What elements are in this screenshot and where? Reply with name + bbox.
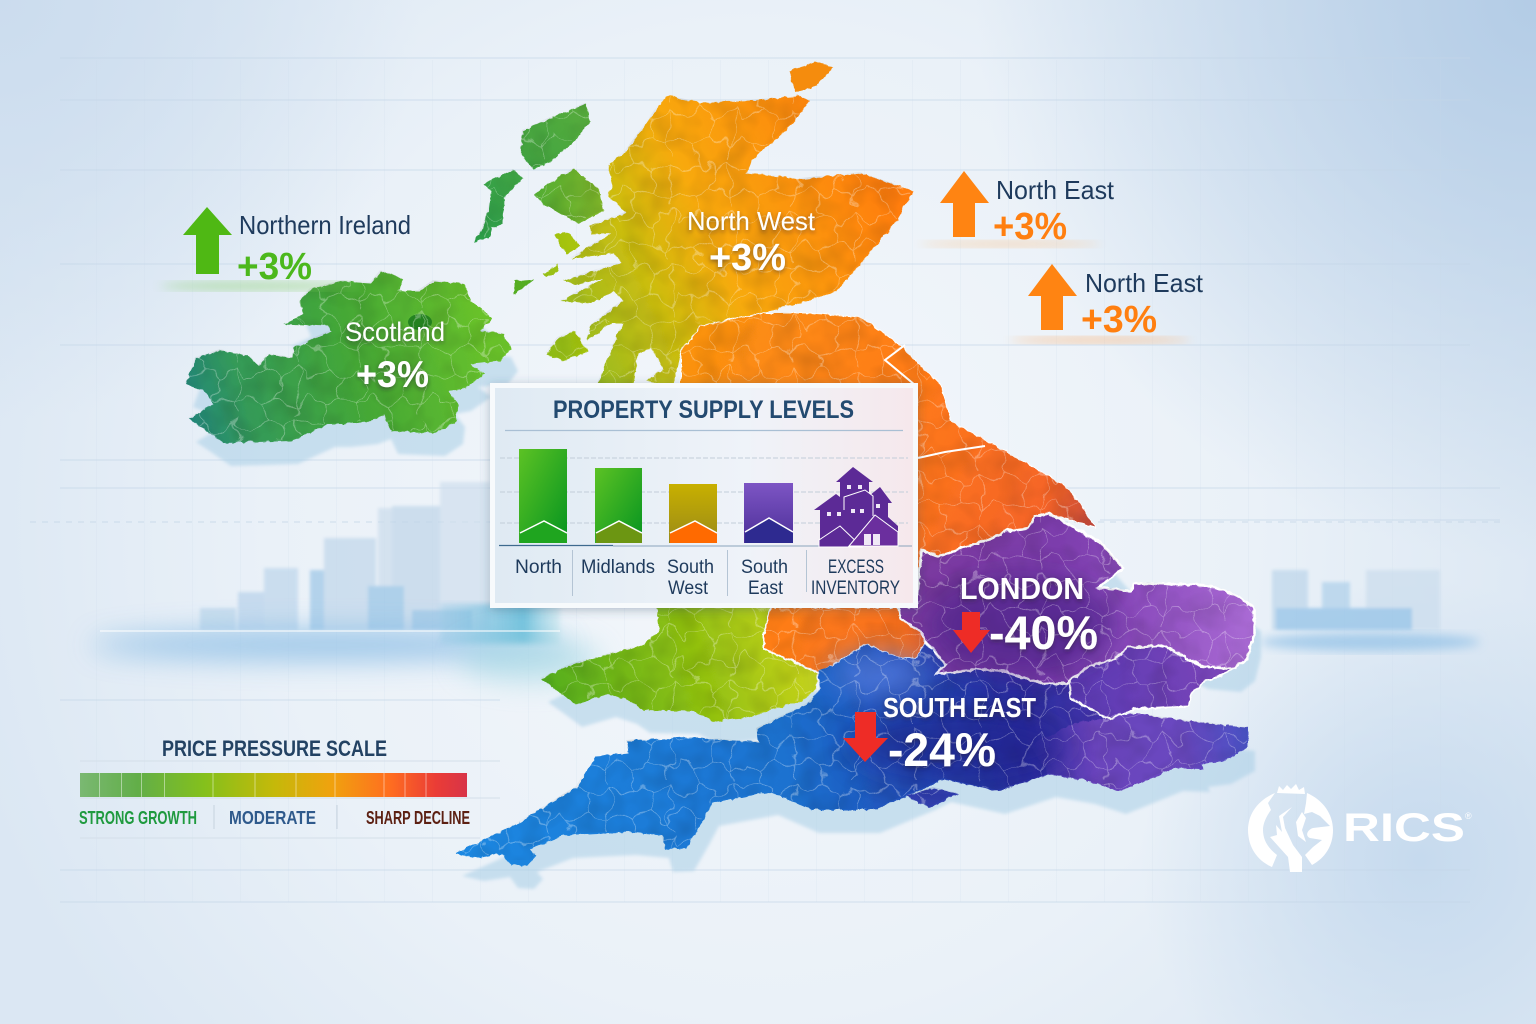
axis labels — [515, 557, 900, 599]
region: Midlands — [763, 606, 925, 671]
map shadow — [193, 294, 1261, 889]
label: Northern Ireland — [160, 207, 411, 290]
arrow: up orange — [940, 171, 989, 237]
value: -24% — [888, 723, 996, 776]
label: North East lower — [1010, 264, 1204, 343]
panel: property supply levels — [490, 383, 918, 608]
legend: price pressure scale — [79, 736, 500, 838]
registered mark: ® — [1465, 811, 1472, 821]
scale labels: SHARP DECLINE — [366, 808, 470, 828]
axis labels: South — [741, 557, 788, 578]
region: Islay — [513, 278, 533, 293]
label: Scotland: +3% — [356, 354, 429, 395]
value: +3% — [1081, 299, 1157, 341]
region: East and London — [897, 512, 1253, 683]
region boundary: north — [885, 345, 985, 458]
name: North East — [996, 175, 1115, 205]
region: Skye — [533, 168, 603, 222]
icon: lion — [1248, 784, 1333, 872]
axis labels: Midlands — [581, 557, 655, 578]
value: +3% — [993, 206, 1067, 248]
bar: South East — [744, 483, 793, 543]
region: Ireland — [185, 270, 510, 442]
region: Western Isles south — [473, 169, 522, 242]
region: Essex — [1068, 645, 1233, 718]
heading: PRICE PRESSURE SCALE — [162, 736, 387, 761]
county border texture — [170, 90, 1270, 860]
label: Scotland: Scotland — [345, 317, 445, 347]
name: North East — [1085, 268, 1204, 298]
axis labels: INVENTORY — [811, 578, 900, 599]
label: Scotland — [345, 317, 445, 395]
region: Mull and small isles — [542, 231, 587, 360]
gradient bar — [80, 773, 467, 797]
icon: excess houses — [814, 467, 898, 547]
wordmark: RICS — [1343, 806, 1465, 850]
region: Scotland — [560, 95, 912, 384]
label: North West: +3% — [709, 237, 786, 279]
value: -40% — [989, 606, 1098, 659]
axis labels: West — [668, 578, 709, 599]
axis labels: South — [667, 557, 714, 578]
map of UK and Ireland — [185, 60, 1253, 865]
logo: RICS — [1248, 784, 1472, 872]
bar: South West — [669, 484, 717, 543]
scale labels: STRONG GROWTH — [79, 808, 197, 828]
name: SOUTH EAST — [883, 692, 1036, 723]
region: Wales — [540, 606, 817, 721]
axis labels: EXCESS — [828, 557, 884, 578]
axis labels: North — [515, 557, 562, 578]
axis labels: East — [748, 578, 784, 599]
value: +3% — [237, 246, 312, 288]
region: Kent — [1030, 713, 1247, 790]
label: North West: North West — [687, 206, 816, 236]
region: South West and South — [454, 643, 1247, 865]
region: Northern England — [680, 312, 1095, 610]
region: Western Isles north — [520, 103, 589, 168]
skyline right — [1260, 570, 1480, 651]
name: LONDON — [960, 571, 1084, 606]
label: London — [953, 571, 1098, 659]
arrow: up green — [183, 207, 232, 274]
shading inside regions — [170, 90, 1270, 860]
blue horizontal glow — [90, 604, 600, 682]
bar: North — [519, 449, 567, 543]
scale labels — [79, 808, 470, 828]
name: Northern Ireland — [239, 210, 411, 240]
bar: Midlands — [595, 468, 642, 543]
label: North West — [687, 206, 816, 279]
label: South East — [843, 692, 1036, 776]
scale labels: MODERATE — [229, 808, 316, 828]
arrow: down red — [843, 712, 888, 762]
region: Orkney — [788, 60, 832, 92]
arrow: down red — [953, 612, 990, 653]
skyline left — [200, 482, 490, 630]
heading: PROPERTY SUPPLY LEVELS — [553, 396, 854, 424]
arrow: up orange — [1028, 264, 1077, 330]
label: North East upper — [920, 171, 1115, 248]
region: Isle of Wight — [905, 787, 957, 807]
